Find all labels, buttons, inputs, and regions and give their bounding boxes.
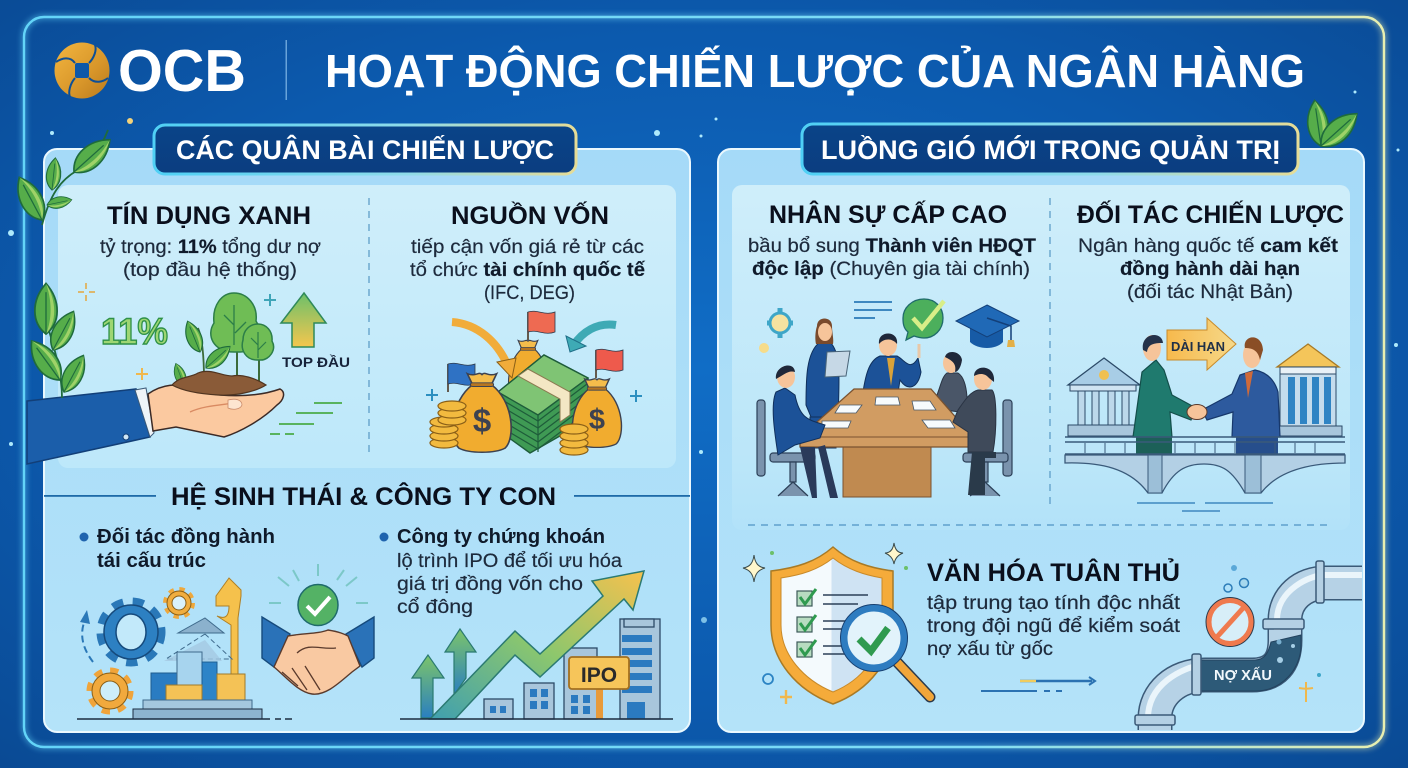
left bag	[453, 373, 511, 452]
rays	[269, 564, 368, 603]
section heading: tín dụng xanh: TÍN DỤNG XANH	[107, 201, 311, 230]
seated right woman	[930, 352, 967, 413]
seated centre man	[863, 334, 921, 393]
shield	[771, 547, 893, 704]
bullet: công ty chứng khoán: Công ty chứng khoán	[397, 526, 605, 548]
illustration: boardroom meeting	[757, 299, 1019, 498]
graduation cap	[956, 305, 1019, 348]
section heading: hệ sinh thái: HỆ SINH THÁI & CÔNG TY CON	[171, 481, 556, 511]
small gold gear	[166, 590, 192, 616]
ground line	[77, 718, 292, 720]
bullet: công ty chứng khoán: lộ trình IPO để tối ưu hóa	[397, 551, 622, 572]
text lines	[854, 302, 892, 318]
checklist	[797, 589, 868, 657]
section heading: văn hóa tuân thủ: tập trung tạo tính độc nhất	[927, 593, 1181, 614]
section heading: đối tác chiến lược	[1077, 199, 1344, 303]
check badge	[298, 584, 338, 626]
card: top two columns	[732, 185, 1350, 530]
bullet: đối tác đồng hành	[80, 526, 275, 572]
panel background	[718, 149, 1364, 732]
illustration: ipo growth chart	[400, 571, 673, 719]
section heading: nguồn vốn: tiếp cận vốn giá rẻ từ các	[411, 237, 644, 258]
section heading: nhân sự cấp cao: NHÂN SỰ CẤP CAO	[769, 199, 1007, 229]
table	[800, 389, 973, 497]
badge: luồng gió mới trong quản trị: LUỒNG GIÓ MỚI TRONG QUẢN TRỊ	[821, 133, 1280, 165]
lower gold gear	[90, 671, 130, 711]
money stack	[498, 355, 588, 453]
section heading: đối tác chiến lược: đồng hành dài hạn	[1120, 259, 1300, 280]
section heading: nhân sự cấp cao: bầu bổ sung Thành viên HĐQT	[748, 236, 1036, 257]
header: logo	[54, 38, 246, 104]
divider line right	[574, 495, 690, 497]
right bag	[573, 379, 621, 447]
chairs	[757, 400, 1012, 496]
arrow: dài hạn: DÀI HẠN	[1171, 339, 1225, 354]
bullet: đối tác đồng hành: Đối tác đồng hành	[97, 526, 275, 548]
flags	[528, 311, 555, 340]
header divider	[286, 40, 287, 100]
section heading: nguồn vốn: NGUỒN VỐN	[451, 200, 609, 230]
illustration: handshake with check	[262, 564, 374, 694]
clasped hands	[1187, 404, 1207, 420]
compass icon	[759, 308, 793, 353]
panel background	[44, 149, 690, 732]
back bag	[509, 340, 547, 400]
section heading: văn hóa tuân thủ	[927, 557, 1181, 660]
column divider	[368, 198, 370, 452]
badge: luồng gió mới trong quản trị	[802, 124, 1298, 174]
section heading: nguồn vốn	[410, 200, 645, 304]
arrow: dài hạn	[1167, 318, 1236, 370]
bullet: công ty chứng khoán: giá trị đồng vốn cho	[397, 574, 583, 595]
section heading: nguồn vốn: tổ chức tài chính quốc tế	[410, 260, 645, 281]
right bank building	[1277, 344, 1342, 436]
section heading: đối tác chiến lược: Ngân hàng quốc tế cam kết	[1078, 236, 1339, 257]
label top đầu: TOP ĐẦU	[282, 354, 350, 370]
arrow: incoming teal	[573, 324, 616, 346]
sleeve	[27, 389, 150, 464]
label nợ xấu: NỢ XẤU	[1214, 667, 1272, 684]
big rising arrow	[430, 571, 644, 719]
seated right man	[953, 368, 996, 495]
coin stacks	[430, 401, 588, 455]
seated left woman	[773, 366, 838, 498]
section heading: nhân sự cấp cao: độc lập (Chuyên gia tài chính)	[752, 259, 1030, 280]
curved arrow	[82, 618, 93, 662]
section heading: tín dụng xanh: tỷ trọng: 11% tổng dư nợ	[100, 237, 321, 258]
background sparkle dots	[8, 89, 1400, 623]
illustration: money bags	[426, 311, 642, 455]
illustration: restructuring gears	[77, 578, 292, 719]
panel: luồng gió mới trong quản trị	[718, 149, 1364, 732]
dashed divider	[748, 524, 1330, 526]
decorative leaves: left top branch	[10, 130, 117, 225]
trees	[171, 293, 274, 388]
prohibition icon	[1209, 600, 1251, 644]
illustration: compliance shield	[743, 543, 930, 704]
bullet: đối tác đồng hành: tái cấu trúc	[97, 550, 206, 572]
11% label: 11%	[101, 311, 168, 352]
logo wordmark: OCB	[118, 38, 246, 104]
left man	[1133, 335, 1196, 455]
section heading: đối tác chiến lược: (đối tác Nhật Bản)	[1127, 282, 1293, 303]
decorative leaves: left lower branch	[23, 283, 91, 398]
title: HOẠT ĐỘNG CHIẾN LƯỢC CỦA NGÂN HÀNG	[325, 45, 1305, 97]
small up arrows	[412, 655, 444, 718]
section heading: văn hóa tuân thủ: nợ xấu từ gốc	[927, 639, 1053, 660]
plus marks	[426, 389, 642, 402]
arrow: incoming gold	[452, 322, 507, 364]
arrow: top đầu	[281, 293, 326, 347]
panel: các quân bài chiến lược	[27, 149, 690, 732]
section heading: tín dụng xanh	[100, 201, 321, 281]
illustration: hand holding seedlings	[27, 283, 350, 464]
gold up arrow	[216, 578, 241, 674]
standing woman	[806, 318, 850, 448]
badge: các quân bài chiến lược	[154, 125, 576, 174]
dirty section	[1198, 635, 1301, 691]
illustration: money bags: $	[589, 404, 605, 436]
right man	[1202, 337, 1280, 455]
speech bubble check	[903, 299, 944, 340]
section heading: nhân sự cấp cao	[748, 199, 1036, 280]
buildings	[484, 619, 660, 719]
illustration: handshake on bridge	[1065, 318, 1345, 511]
badge: các quân bài chiến lược: CÁC QUÂN BÀI CHIẾN LƯỢC	[176, 134, 554, 165]
left cuff	[262, 617, 290, 667]
section heading: nguồn vốn: (IFC, DEG)	[484, 283, 575, 304]
section heading: văn hóa tuân thủ: trong đội ngũ để kiểm soát	[927, 616, 1181, 637]
card: top two columns	[58, 185, 676, 468]
clasped hands	[274, 630, 360, 694]
motion dashes and plus marks	[78, 283, 342, 434]
soil	[172, 371, 266, 395]
hand	[148, 385, 284, 437]
icon: OCB gold emblem	[54, 42, 110, 98]
left bank building	[1068, 358, 1140, 436]
big gear	[101, 602, 161, 662]
arrow: flow	[981, 677, 1095, 691]
ground line	[400, 718, 673, 720]
section heading: tín dụng xanh: (top đầu hệ thống)	[123, 260, 297, 281]
bubbles and sparkles	[1224, 565, 1321, 702]
right cuff	[346, 617, 374, 667]
pipe flanges	[1135, 561, 1324, 725]
bullet: công ty chứng khoán	[380, 526, 622, 618]
illustration: money bags: $	[473, 402, 491, 439]
pyramid blocks	[133, 618, 262, 719]
section heading: đối tác chiến lược: ĐỐI TÁC CHIẾN LƯỢC	[1077, 199, 1344, 229]
decorative leaves: right top	[1305, 99, 1364, 154]
bridge	[1065, 437, 1345, 511]
ipo sign	[569, 657, 629, 719]
column divider	[1049, 198, 1051, 506]
illustration: bad debt pipe	[1135, 561, 1362, 730]
section heading: văn hóa tuân thủ: VĂN HÓA TUÂN THỦ	[927, 557, 1180, 587]
divider line left	[44, 495, 156, 497]
bullet: công ty chứng khoán: cổ đông	[397, 597, 473, 618]
stars and dots	[743, 543, 908, 704]
magnifier	[840, 604, 930, 697]
ipo sign: IPO	[581, 664, 617, 687]
pipe	[1148, 575, 1362, 730]
